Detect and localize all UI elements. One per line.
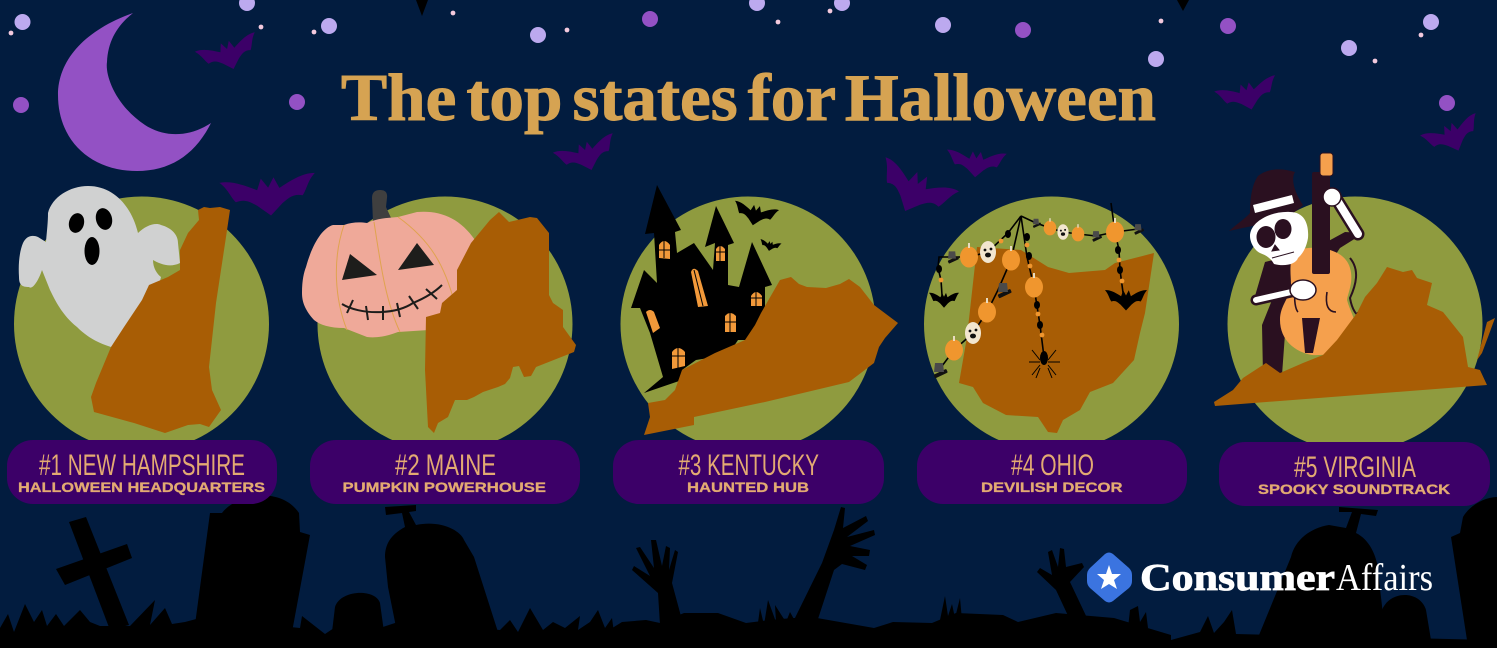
pill: Kentucky <box>613 440 884 504</box>
state: Kentucky <box>644 277 898 435</box>
icon: pumpkin <box>302 190 475 337</box>
pill: New Hampshire: HALLOWEEN HEADQUARTERS <box>18 479 265 495</box>
state: New Hampshire <box>91 207 230 433</box>
stars <box>9 0 1455 113</box>
panel: New Hampshire <box>7 186 277 504</box>
pill: Maine: PUMPKIN POWERHOUSE <box>342 479 546 495</box>
state: Ohio <box>959 247 1154 433</box>
state: Virginia <box>1214 267 1495 406</box>
icon: skeleton with cello <box>1229 153 1364 375</box>
circle 4 <box>924 196 1179 452</box>
icon: ghost <box>19 186 180 347</box>
state: Maine <box>425 212 576 433</box>
pill: Kentucky: #3 KENTUCKY <box>678 449 819 482</box>
graveyard silhouette <box>0 496 1497 648</box>
pill: Virginia: SPOOKY SOUNDTRACK <box>1258 481 1450 497</box>
panel: Maine <box>302 190 580 504</box>
circle 1 <box>14 196 269 452</box>
icon: hexagon star <box>1087 552 1132 602</box>
circle 5 <box>1228 196 1482 452</box>
logo: ConsumerAffairs: Consumer <box>1140 557 1335 599</box>
panel: Ohio <box>917 196 1187 504</box>
pill: Virginia: #5 VIRGINIA <box>1294 451 1416 484</box>
pill: Ohio <box>917 440 1187 504</box>
pill: Maine: #2 MAINE <box>395 449 496 482</box>
title: The top states for Halloween <box>341 61 1156 135</box>
pill: Kentucky: HAUNTED HUB <box>687 479 809 495</box>
logo: ConsumerAffairs <box>1087 552 1433 602</box>
moon <box>58 13 211 171</box>
panel: Kentucky <box>613 185 898 504</box>
top drips <box>416 0 1189 16</box>
pill: Virginia <box>1219 442 1490 506</box>
circle 3 <box>620 196 876 452</box>
circle 2 <box>318 196 572 452</box>
panel: Virginia <box>1214 153 1495 506</box>
pill: New Hampshire: #1 NEW HAMPSHIRE <box>39 449 245 482</box>
pill: Ohio: #4 OHIO <box>1011 449 1094 482</box>
icon: garland <box>929 203 1147 378</box>
logo: ConsumerAffairs: Affairs <box>1336 557 1433 599</box>
bats <box>195 32 1486 228</box>
icon: haunted house <box>631 185 782 393</box>
pill: New Hampshire <box>7 440 277 504</box>
pill: Ohio: DEVILISH DECOR <box>981 479 1122 495</box>
pill: Maine <box>310 440 580 504</box>
